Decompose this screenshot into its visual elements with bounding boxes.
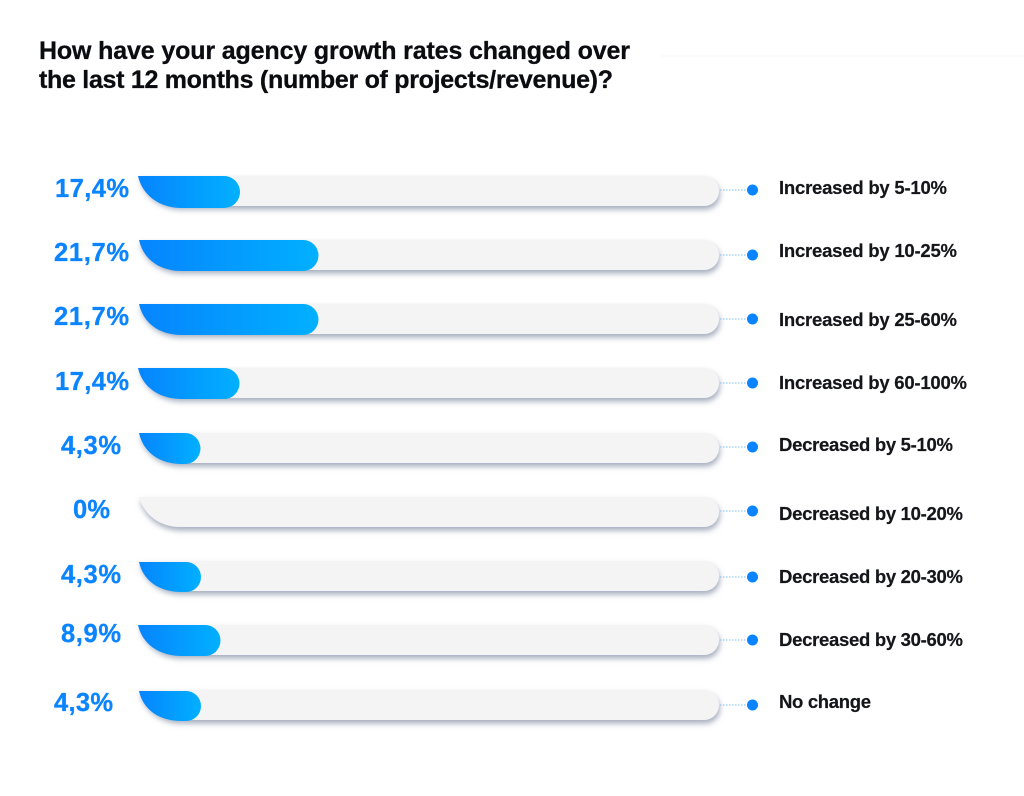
row: increased by 5-10%: 17,4% [55, 175, 129, 203]
row: decreased by 30-60%: Decreased by 30-60% [779, 629, 963, 650]
row: increased by 25-60%: Increased by 25-60% [779, 309, 957, 330]
row: decreased by 30-60% [61, 620, 963, 656]
row: decreased by 10-20% [73, 496, 963, 527]
title [39, 37, 630, 94]
row: no change: No change [779, 691, 871, 712]
row: decreased by 5-10% [61, 432, 953, 464]
row: increased by 5-10% [55, 175, 947, 208]
row: increased by 60-100% [55, 368, 967, 399]
row: decreased by 20-30%: Decreased by 20-30% [779, 566, 963, 587]
row: increased by 25-60% [54, 303, 957, 335]
row: decreased by 5-10%: Decreased by 5-10% [779, 434, 953, 455]
row: increased by 10-25%: Increased by 10-25% [779, 240, 957, 261]
row: decreased by 10-20%: Decreased by 10-20% [779, 503, 963, 524]
row: decreased by 20-30%: 4,3% [61, 561, 121, 589]
title: the last 12 months (number of projects/revenue)? [39, 66, 613, 94]
row: increased by 5-10%: Increased by 5-10% [779, 177, 947, 198]
row: decreased by 30-60%: 8,9% [61, 620, 121, 648]
row: decreased by 5-10%: 4,3% [61, 432, 121, 460]
row: increased by 10-25% [54, 239, 957, 271]
row: decreased by 20-30% [61, 561, 963, 592]
row: increased by 60-100%: Increased by 60-100% [779, 372, 967, 393]
title: How have your agency growth rates changed over [39, 37, 630, 65]
row: increased by 25-60%: 21,7% [54, 303, 129, 331]
row: increased by 10-25%: 21,7% [54, 239, 129, 267]
row: no change: 4,3% [54, 689, 113, 717]
row: decreased by 10-20%: 0% [73, 496, 110, 524]
row: no change [54, 689, 871, 721]
row: increased by 60-100%: 17,4% [55, 368, 129, 396]
